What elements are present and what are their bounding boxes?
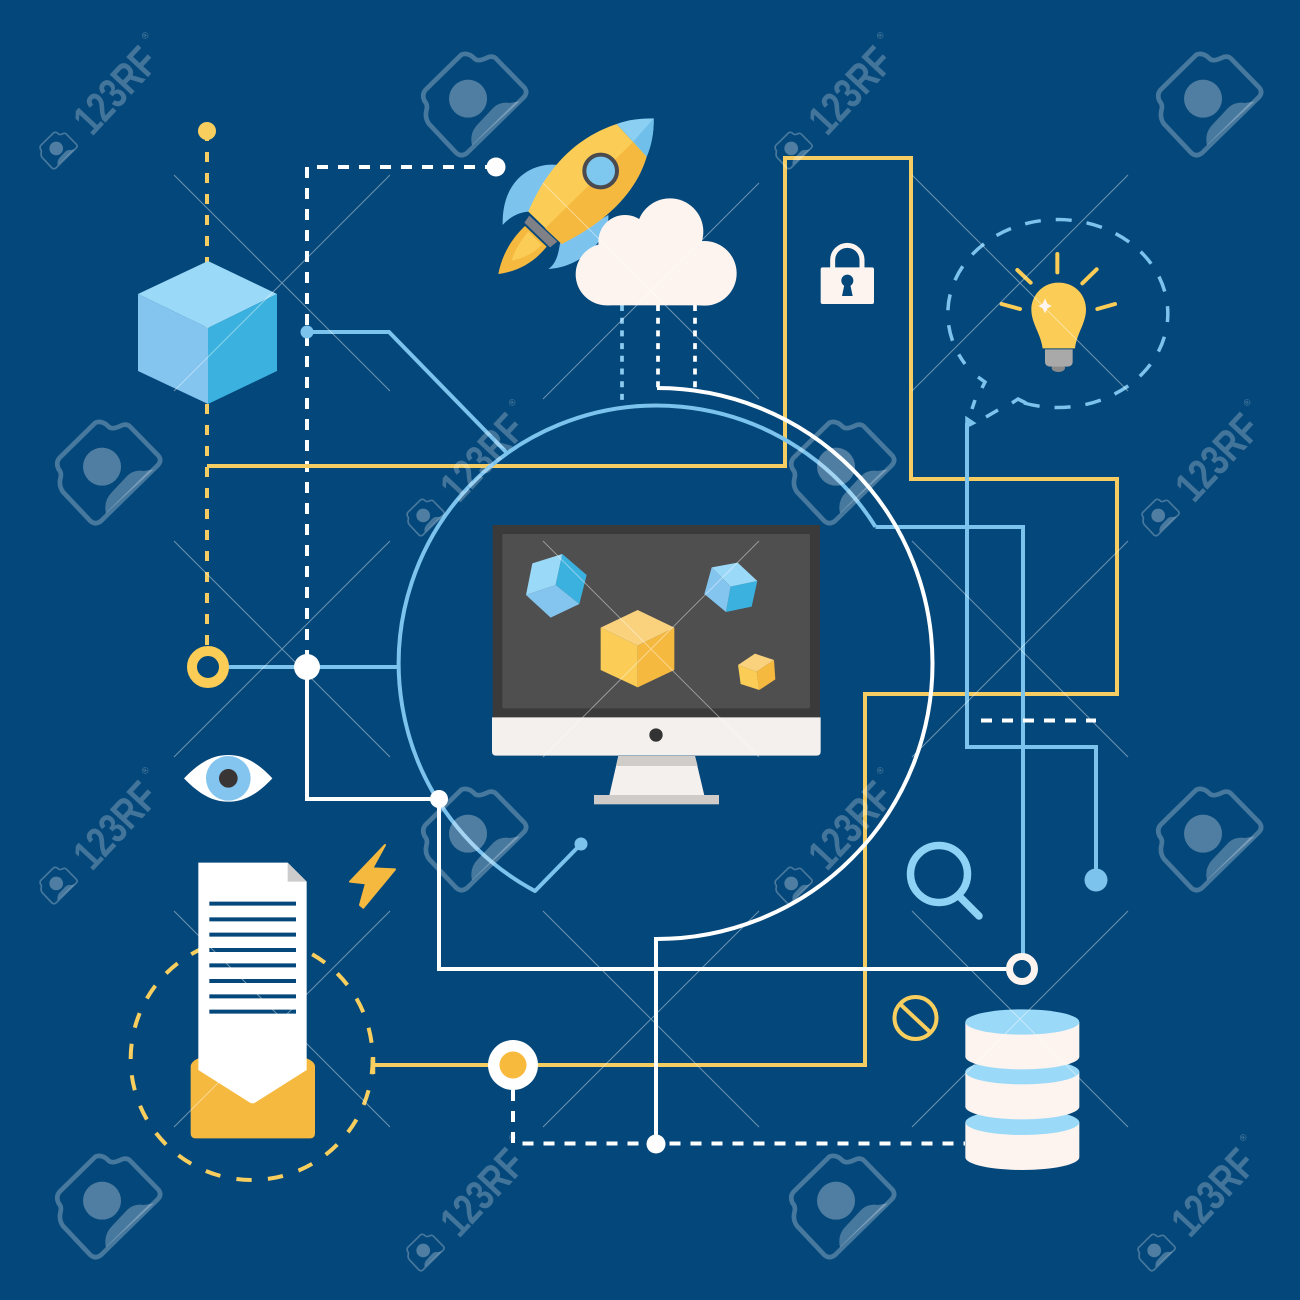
database middle layer — [965, 1059, 1079, 1119]
main yellow circuit line — [207, 158, 1117, 1065]
icon: blue cube — [138, 261, 277, 404]
cloud dashed line right — [693, 305, 697, 390]
white elbow line — [307, 667, 1010, 969]
icon: database — [965, 1009, 1079, 1170]
document sheet — [198, 863, 307, 1103]
dashed circle — [131, 938, 373, 1180]
top yellow dot — [198, 122, 216, 140]
monitor camera dot — [649, 728, 663, 742]
yellow dashed vertical line — [205, 131, 209, 648]
bottom white dot — [646, 1134, 666, 1154]
screen blue cube left — [526, 554, 587, 618]
rocket line white dot — [486, 158, 506, 176]
icon: light bulb — [1002, 254, 1115, 372]
monitor chin — [492, 717, 821, 756]
light blue line from dashed line to ring — [307, 332, 506, 452]
light blue branch from ring to right — [876, 527, 1023, 955]
network connector lines — [207, 131, 1117, 1144]
icon: magnifier — [910, 846, 979, 916]
database top layer — [965, 1009, 1079, 1069]
icon: padlock — [821, 245, 874, 304]
database bottom layer — [965, 1110, 1079, 1170]
right blue end dot — [1084, 868, 1108, 892]
document and envelope — [131, 845, 395, 1180]
tail dot — [574, 838, 588, 850]
right light blue line — [967, 423, 1096, 880]
bottom white dashed line — [513, 1090, 965, 1144]
monitor with cubes — [492, 525, 821, 804]
light blue line to yellow node — [208, 665, 399, 669]
monitor frame — [493, 525, 820, 718]
white ring node — [1010, 956, 1034, 982]
monitor screen — [502, 534, 810, 708]
screen yellow cube large — [601, 610, 674, 687]
nodes — [192, 122, 1108, 1154]
thin diagonal crosses overlay — [174, 175, 1128, 1127]
icon: dashed idea ring — [948, 220, 1168, 426]
monitor stand — [594, 756, 719, 804]
bottom white yellow node — [488, 1040, 538, 1090]
icon: eye — [184, 755, 272, 802]
document fold — [288, 863, 307, 882]
screen yellow cube small — [738, 654, 775, 690]
cloud dashed line center — [656, 305, 660, 388]
screen blue cube right — [704, 563, 757, 612]
icon: lightning bolt — [350, 845, 395, 908]
white elbow node — [430, 790, 448, 808]
icon: prohibited sign — [894, 997, 936, 1039]
icon: rocket — [498, 118, 654, 274]
white half ring — [656, 388, 932, 1144]
white dashed right line — [981, 718, 1096, 722]
light blue ring and tail — [399, 406, 876, 891]
white large node — [294, 654, 320, 680]
document text lines — [209, 904, 296, 1012]
envelope — [191, 1058, 315, 1138]
white dashed line to rocket — [307, 167, 496, 660]
cloud dashed line blue — [620, 305, 624, 406]
yellow end cap — [371, 1057, 375, 1074]
icon: cloud — [576, 198, 737, 306]
yellow ring node — [192, 651, 224, 683]
light blue small dot — [300, 326, 314, 338]
